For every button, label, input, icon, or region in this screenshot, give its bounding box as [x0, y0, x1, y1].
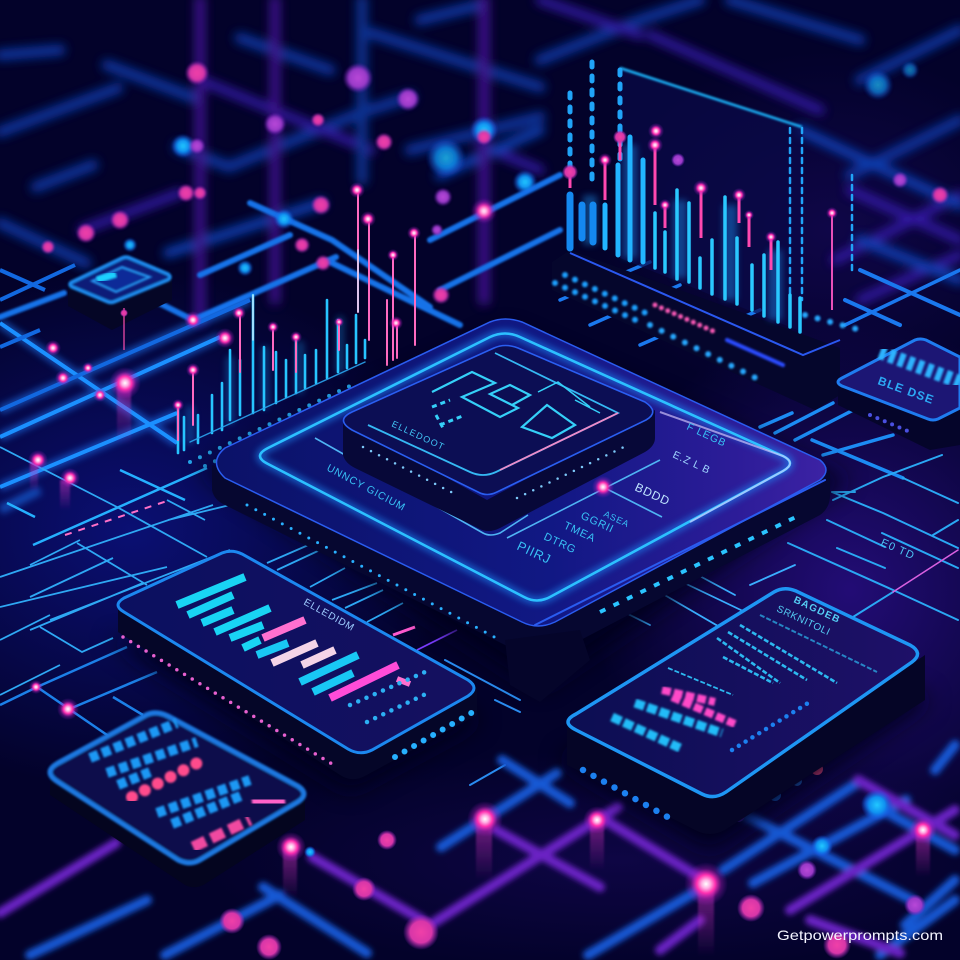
chip top face — [216, 319, 826, 626]
die glyph dots — [432, 400, 465, 430]
chip label: ELLEDIDM — [302, 597, 356, 634]
chip pins — [583, 770, 673, 820]
right side traces — [445, 262, 960, 785]
chip heading: BAGDEB — [792, 595, 842, 626]
bottom right chip shadow — [560, 640, 930, 850]
die glyph wire — [538, 382, 600, 413]
bottom left analytics chip — [118, 551, 477, 779]
chip outline — [260, 334, 790, 600]
top die — [343, 346, 655, 531]
mid circuit traces, soft — [0, 175, 560, 325]
schematic label: E0 TD — [879, 537, 917, 562]
bottom far left chip — [50, 713, 305, 887]
chip pink blocks — [193, 820, 250, 847]
chip cyan bars — [612, 703, 722, 748]
main chip shadow — [200, 330, 850, 690]
chip body — [212, 465, 830, 658]
chip dot row — [732, 700, 813, 750]
chip pink dots — [132, 760, 203, 797]
chip labels — [325, 421, 728, 567]
chip pins — [247, 480, 825, 640]
panel base pins — [555, 275, 860, 380]
chip labels: PIIRJ — [515, 538, 554, 567]
chip labels: UNNCY GICIUM — [325, 462, 408, 514]
panel bars glow — [590, 145, 775, 320]
chip pink heart — [252, 800, 285, 803]
chip pink bars — [662, 690, 735, 724]
chip pins — [123, 637, 337, 767]
bright thick traces, core — [0, 265, 250, 545]
chip outline glow — [260, 334, 790, 600]
watermark: Getpowerprompts.com — [777, 927, 943, 943]
right chip — [838, 339, 960, 450]
small chip: upper left — [68, 257, 172, 350]
thin lower-left traces — [0, 447, 467, 737]
chip labels: TMEA — [562, 520, 597, 545]
die lit edge — [500, 413, 618, 470]
panel bars — [570, 137, 800, 332]
chip inner lines — [315, 438, 662, 538]
chip dot rows — [350, 672, 430, 722]
chip text lines — [668, 615, 877, 695]
chip blue blocks — [90, 723, 250, 824]
die label: ELLEDOOT — [390, 419, 447, 452]
main processor chip — [212, 319, 830, 702]
panel frame — [620, 68, 802, 127]
chip pins right — [395, 712, 473, 757]
node stems — [30, 385, 930, 956]
top right dashboard panel — [552, 62, 860, 410]
panel base — [552, 250, 840, 410]
chip labels: E.Z L B — [671, 449, 712, 477]
glowing nodes, near — [28, 311, 937, 960]
chip pink node — [592, 476, 614, 498]
chip labels: F LEGB — [685, 421, 728, 450]
bar chart: left rising bars — [178, 190, 415, 466]
chip labels: ASEA — [602, 509, 631, 529]
panel dotted columns — [570, 62, 852, 310]
blurred far circuit traces — [0, 0, 960, 320]
panel tips — [562, 123, 838, 243]
chip bars — [177, 577, 410, 698]
die inner outline — [368, 353, 618, 475]
chip labels: DTRG — [542, 531, 578, 556]
bar tips — [172, 182, 421, 411]
die glyph pattern — [432, 372, 575, 438]
right chip: BLE DSE — [876, 374, 936, 407]
bottom left chip shadow — [110, 640, 480, 790]
chip subheading: SRKNITOLI — [775, 604, 832, 638]
bright thick traces, glow — [0, 300, 250, 510]
foreground blurred traces — [0, 745, 955, 955]
panel pink stems — [570, 137, 771, 270]
chip labels: GGRII — [579, 510, 616, 536]
die pins — [363, 445, 628, 498]
chip labels: BDDD — [633, 480, 672, 508]
chip right edge highlight — [660, 412, 790, 522]
bottom right report chip — [567, 589, 925, 834]
glowing nodes, far — [41, 61, 949, 304]
panel screen — [620, 68, 802, 332]
